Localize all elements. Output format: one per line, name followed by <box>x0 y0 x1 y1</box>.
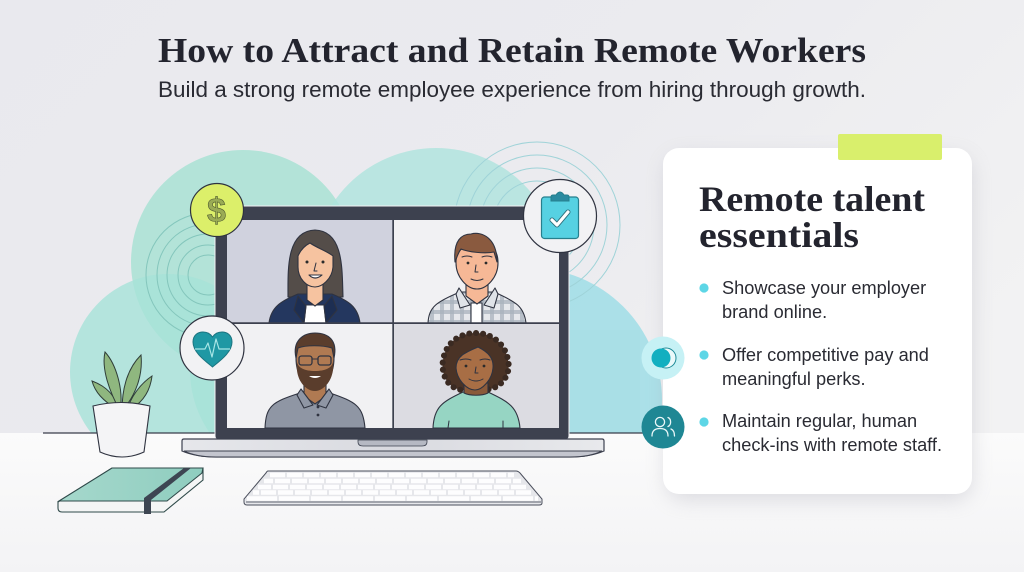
icon: dollar badge: $ <box>207 192 226 230</box>
bullet 2: Offer competitive pay and <box>722 345 929 365</box>
bullet 1 <box>699 278 926 322</box>
laptop base lower edge <box>184 451 602 457</box>
desk edge line <box>43 432 650 434</box>
bullet 3: Maintain regular, human <box>722 411 917 431</box>
icon: heart badge <box>180 316 244 380</box>
plant leaves <box>92 352 152 411</box>
bullet 3: check-ins with remote staff. <box>722 435 942 455</box>
laptop notch <box>358 440 427 446</box>
icon: toggle badge <box>642 336 684 380</box>
video tile: woman in navy blazer <box>227 220 393 323</box>
screen grid lines <box>227 220 559 428</box>
video tile: woman with curly hair <box>394 324 559 428</box>
icon: people badge <box>642 406 684 448</box>
background blobs <box>70 148 662 432</box>
card heading <box>699 179 925 255</box>
bullet 2 <box>699 345 929 389</box>
subtitle: Build a strong remote employee experience from hiring through growth. <box>158 77 866 102</box>
signal rings: left <box>146 215 214 332</box>
video tile: man in plaid shirt <box>394 220 559 323</box>
signal rings: right <box>454 142 620 308</box>
plant pot <box>93 402 150 457</box>
bullet 1: Showcase your employer <box>722 278 926 298</box>
icon: dollar badge <box>190 184 244 236</box>
desk surface <box>0 433 1024 572</box>
lime tab <box>838 134 942 160</box>
laptop screen bezel <box>215 206 569 440</box>
panel: remote talent essentials <box>663 134 972 494</box>
bullet 3 <box>699 411 942 455</box>
card shadow <box>666 156 972 500</box>
title: How to Attract and Retain Remote Workers <box>158 31 866 70</box>
bullet 2: meaningful perks. <box>722 369 866 389</box>
notebook <box>58 468 203 514</box>
laptop <box>182 206 604 457</box>
video tile: bearded man with glasses <box>227 324 393 428</box>
keyboard keys <box>247 475 538 498</box>
card heading: Remote talent <box>699 179 925 219</box>
icon: clipboard badge <box>524 180 596 252</box>
keyboard <box>244 471 542 505</box>
laptop base <box>182 439 604 457</box>
card heading: essentials <box>699 215 859 255</box>
potted plant <box>92 352 152 457</box>
bullet 1: brand online. <box>722 302 827 322</box>
